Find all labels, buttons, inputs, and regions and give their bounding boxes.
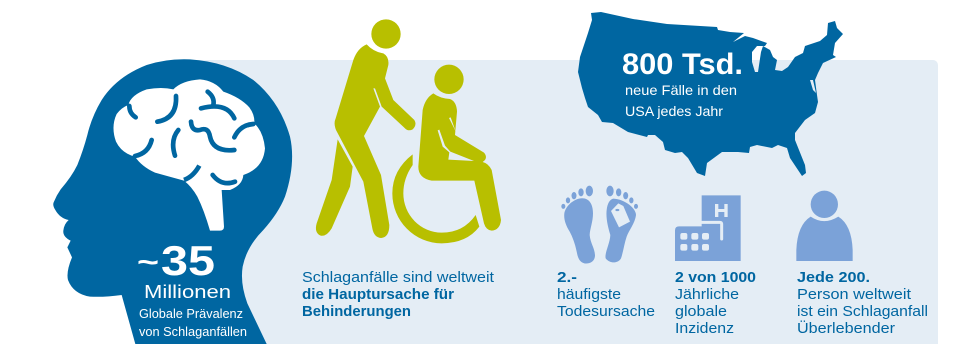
icon: caregiver pushing wheelchair xyxy=(316,19,501,243)
stat: global incidence: 2 von 1000 xyxy=(675,270,756,286)
caption line 1: Globale Prävalenz xyxy=(139,307,243,321)
stat: 800 Tsd.: neue Fälle in den xyxy=(625,82,737,98)
stat: 800 Tsd.: USA jedes Jahr xyxy=(625,103,723,119)
stat: global incidence xyxy=(675,270,756,337)
stat: global incidence: Inzidenz xyxy=(675,321,734,337)
icon: person xyxy=(796,191,853,261)
stat: 35 million xyxy=(137,237,247,339)
stat: second cause of death: 2.- xyxy=(557,270,577,286)
text: disability statement: die Hauptursache für xyxy=(302,287,454,303)
stat: survivors: Person weltweit xyxy=(797,287,911,303)
stat: 800 Tsd.: 800 Tsd. xyxy=(622,48,743,81)
stat: survivors: ist ein Schlaganfall xyxy=(797,304,928,320)
number 35: 35 xyxy=(161,237,215,284)
icon: feet with toe tag xyxy=(561,186,638,263)
stat: survivors: Überlebender xyxy=(797,319,895,337)
icon: hospital xyxy=(675,195,741,261)
stat: survivors: Jede 200. xyxy=(797,270,870,286)
tilde: ~ xyxy=(137,246,159,279)
stat: second cause of death xyxy=(557,270,655,320)
panel: light blue background xyxy=(190,60,938,344)
map: USA xyxy=(578,12,843,176)
caption line 2: von Schlaganfällen xyxy=(139,325,247,339)
stat: second cause of death: Todesursache xyxy=(557,304,655,320)
stat: global incidence: Jährliche xyxy=(675,287,739,303)
unit: Millionen xyxy=(144,282,231,302)
text: disability statement: Schlaganfälle sind weltweit xyxy=(302,270,494,286)
stat: second cause of death: häufigste xyxy=(557,287,621,303)
stat: 800 Tsd. xyxy=(622,48,743,119)
text: disability statement xyxy=(302,270,494,320)
stat: survivors xyxy=(797,270,928,337)
icon: head silhouette with brain xyxy=(53,59,292,344)
stat: global incidence: globale xyxy=(675,304,727,320)
text: disability statement: Behinderungen xyxy=(302,304,411,320)
